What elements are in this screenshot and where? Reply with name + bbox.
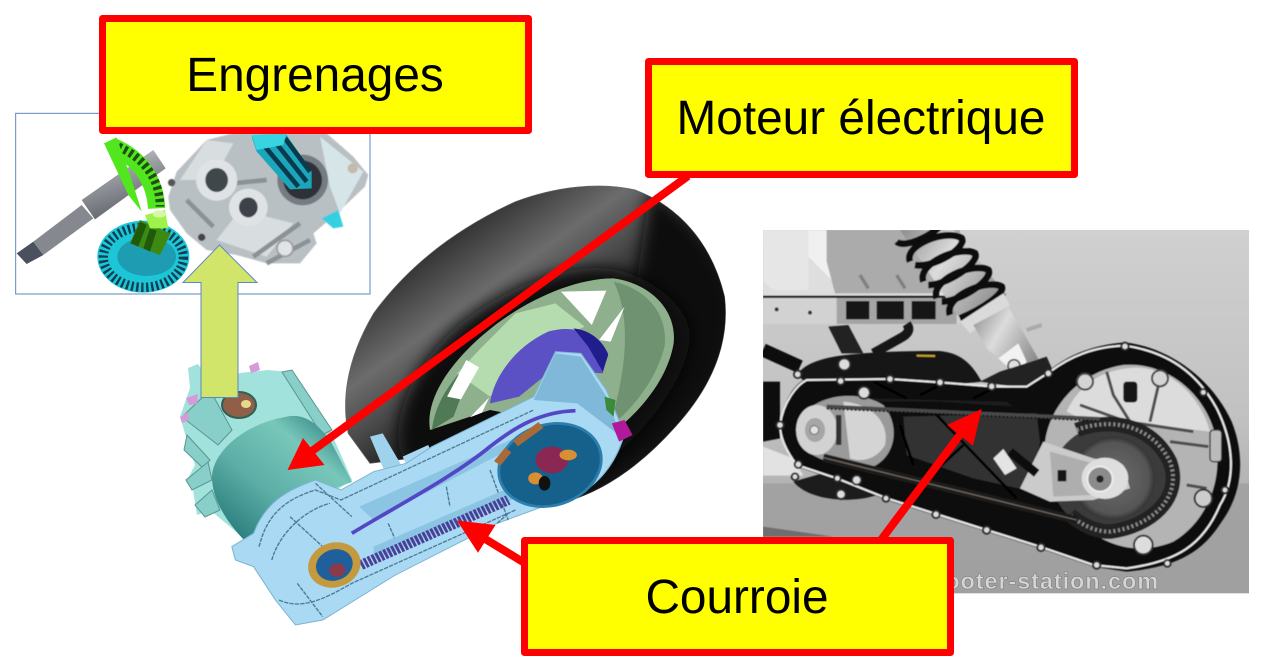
pulley hub bracket <box>1020 442 1130 502</box>
callout: Courroie: Courroie <box>645 571 829 624</box>
motor cylinder <box>212 416 352 540</box>
clamp <box>612 420 633 442</box>
callout: Moteur électrique: Moteur électrique <box>677 92 1045 145</box>
watermark text: scooter-station.com <box>917 568 1159 594</box>
belt housing <box>779 342 1240 572</box>
belt <box>827 407 1100 419</box>
shock absorber spring <box>897 220 1007 323</box>
upper belt <box>352 411 575 533</box>
shock absorber lower mount <box>960 293 1010 333</box>
tire shading <box>398 190 730 502</box>
arrow: label to electric motor <box>288 176 688 470</box>
arrow: label to belt in the photo <box>881 409 982 540</box>
callout: Engrenages: Engrenages <box>186 49 444 102</box>
arrow: label to belt in the illustration <box>457 520 523 562</box>
cyan gear <box>97 210 189 293</box>
illustration: electric motor <box>180 362 352 540</box>
callout: Engrenages <box>102 18 528 130</box>
illustration: transmission arm <box>232 352 633 625</box>
shaft <box>17 150 166 264</box>
wheel rim <box>429 278 674 433</box>
big pulley <box>484 408 616 522</box>
housing <box>168 132 368 263</box>
arm top fins <box>370 433 410 480</box>
arm casing <box>232 352 625 625</box>
big pulley hub colours <box>497 425 577 491</box>
large pulley plate <box>1045 365 1218 548</box>
purple hub <box>490 329 608 403</box>
cyan splined shaft <box>252 133 312 189</box>
large toothed pulley and belt <box>1058 430 1166 526</box>
small pulley <box>800 396 894 467</box>
callout: Moteur électrique <box>648 62 1074 174</box>
photo: scooter belt drive on the right <box>763 220 1249 593</box>
panel: gears photo <box>16 113 370 294</box>
green gear <box>104 137 160 212</box>
tire <box>346 186 726 502</box>
lower toothed belt <box>361 500 508 565</box>
callout: Courroie <box>524 540 950 652</box>
illustration: scooter tire and wheel <box>346 186 730 502</box>
small pulley <box>299 534 370 596</box>
motor rear body <box>180 364 352 540</box>
rear motor cover <box>800 350 982 384</box>
arrow: motor up to gears <box>183 245 257 398</box>
housing bolts <box>776 343 1228 569</box>
